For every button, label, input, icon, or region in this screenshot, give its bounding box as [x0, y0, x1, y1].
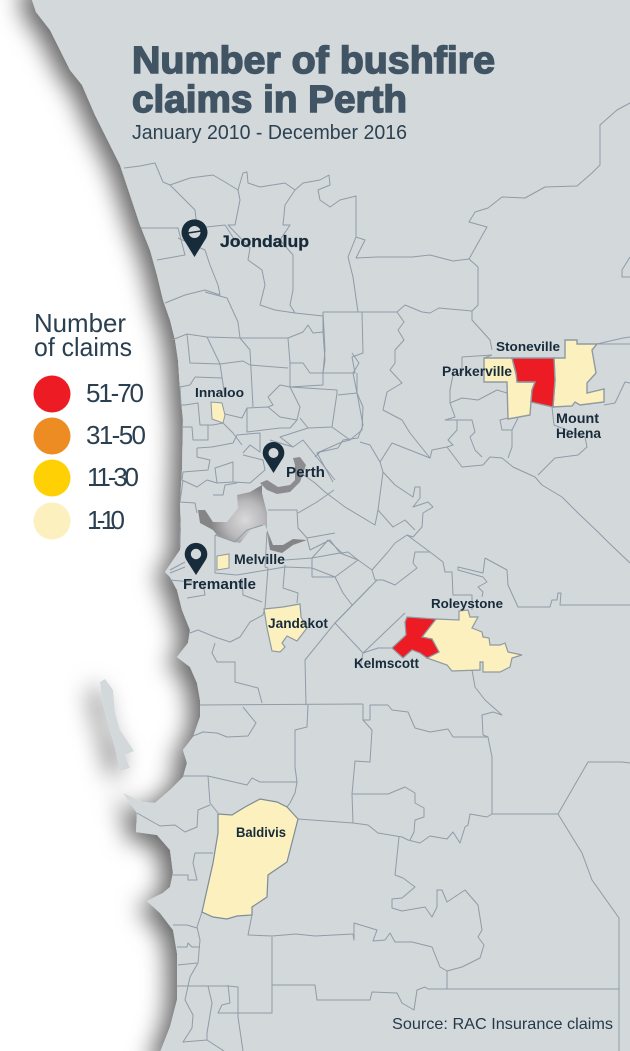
title: Number of bushfire — [132, 40, 495, 82]
label: Parkerville: Parkerville — [442, 364, 512, 379]
label: Innaloo: Innaloo — [195, 385, 244, 400]
legend item: 11-30: 11-30 — [87, 462, 139, 492]
title — [132, 40, 495, 121]
subtitle: January 2010 - December 2016 — [132, 122, 407, 144]
label: Mount Helena — [556, 411, 601, 441]
legend heading — [34, 308, 132, 362]
region: Stoneville — [512, 358, 555, 407]
label: Joondalup: Joondalup — [220, 233, 309, 251]
icon: pin Perth — [263, 442, 284, 473]
label: Roleystone: Roleystone — [431, 596, 503, 611]
legend — [34, 308, 146, 540]
label: Kelmscott: Kelmscott — [354, 656, 420, 671]
legend item: 31-50: 31-50 — [86, 420, 146, 450]
source note: Source: RAC Insurance claims — [392, 1016, 613, 1033]
label: Perth: Perth — [286, 465, 325, 481]
title: claims in Perth — [132, 79, 407, 121]
icon: pin Fremantle — [185, 543, 207, 575]
region: Jandakot — [264, 604, 307, 652]
label: Mount Helena: Mount — [556, 411, 600, 426]
legend heading: of claims — [34, 332, 132, 362]
region: Mount Helena — [553, 340, 604, 407]
legend item: 11-30 — [34, 460, 139, 496]
suburb boundary lines — [124, 103, 630, 1051]
label: Mount Helena: Helena — [556, 426, 601, 441]
Swan River — [198, 457, 307, 553]
legend item: 51-70: 51-70 — [86, 378, 144, 408]
legend item: 51-70 — [34, 376, 144, 412]
region: Kelmscott — [392, 617, 439, 658]
legend item: 1-10 — [34, 502, 125, 540]
legend item: 31-50 — [34, 418, 146, 454]
label: Stoneville: Stoneville — [496, 339, 560, 354]
region: Parkerville — [484, 358, 535, 419]
region: Melville — [217, 554, 229, 570]
region: Baldivis — [202, 799, 298, 919]
label: Jandakot: Jandakot — [268, 616, 328, 631]
label: Baldivis: Baldivis — [236, 825, 286, 840]
icon: pin Joondalup — [182, 219, 208, 257]
label: Melville: Melville — [234, 552, 286, 567]
legend heading: Number — [34, 308, 126, 338]
place labels — [183, 233, 601, 840]
region: Innaloo — [211, 402, 225, 423]
label: Fremantle: Fremantle — [183, 577, 256, 593]
legend item: 1-10: 1-10 — [87, 505, 125, 535]
region: Roleystone — [422, 610, 522, 672]
